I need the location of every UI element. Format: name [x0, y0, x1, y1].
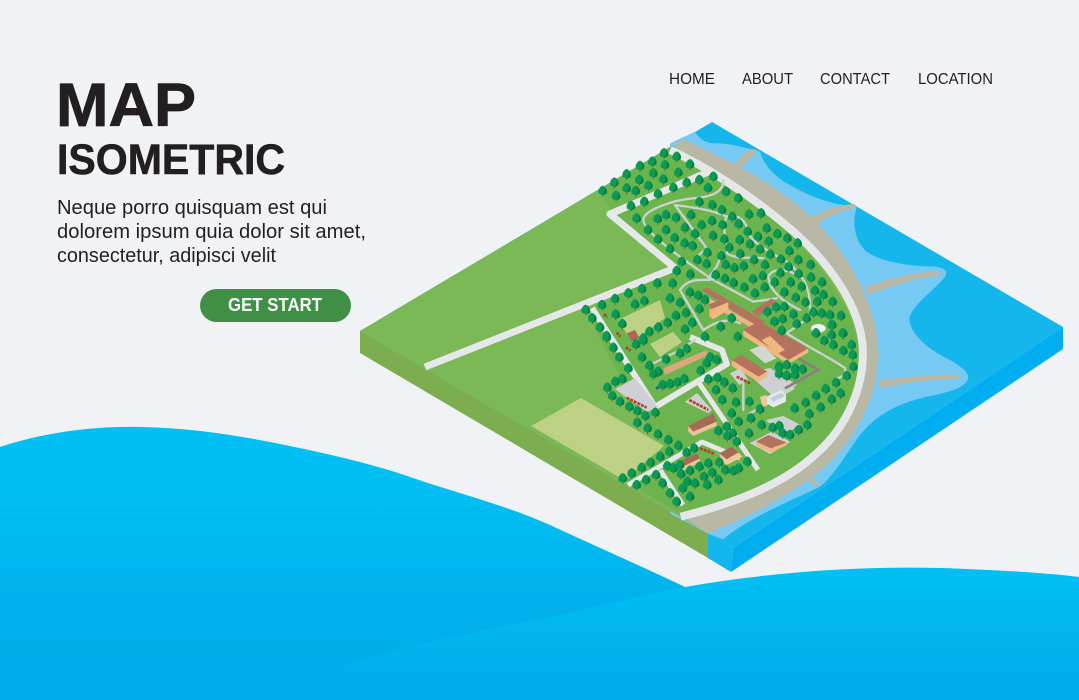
title: ISOMETRIC: ISOMETRIC [57, 136, 285, 184]
lower buildings [627, 330, 801, 471]
water surface [360, 122, 1063, 548]
background wave: front [270, 568, 1079, 700]
embankment and coastal road [670, 139, 878, 533]
sports field [531, 398, 664, 480]
trees: southern grounds [602, 320, 858, 507]
description text: Neque porro quisquam est qui [57, 197, 327, 219]
navigation menu [669, 71, 993, 88]
button: get start [200, 289, 351, 322]
parking lots and small lawns [615, 300, 800, 454]
navigation menu: HOME [669, 71, 715, 88]
trees: northern park [581, 148, 848, 344]
hospital buildings [702, 287, 826, 407]
navigation menu: ABOUT [742, 71, 793, 88]
description text: consectetur, adipisci velit [57, 245, 276, 267]
navigation menu: CONTACT [820, 71, 890, 88]
platform side: water [708, 533, 733, 572]
land: park [585, 168, 860, 514]
road network [425, 170, 758, 505]
platform side: right [731, 327, 1063, 572]
button: get start: GET START [228, 295, 322, 315]
description text: dolorem ipsum quia dolor sit amet, [57, 221, 366, 243]
navigation menu: LOCATION [918, 71, 993, 88]
shoreline water and breakwaters [670, 132, 968, 539]
land: field [360, 146, 869, 533]
platform side: land [360, 331, 708, 558]
description text [57, 197, 366, 267]
isometric map platform [360, 122, 1063, 572]
parked cars [604, 314, 750, 454]
land: wedge green [600, 146, 712, 212]
title: MAP: MAP [56, 71, 196, 139]
background wave: back [0, 427, 700, 700]
park paths [643, 180, 845, 413]
